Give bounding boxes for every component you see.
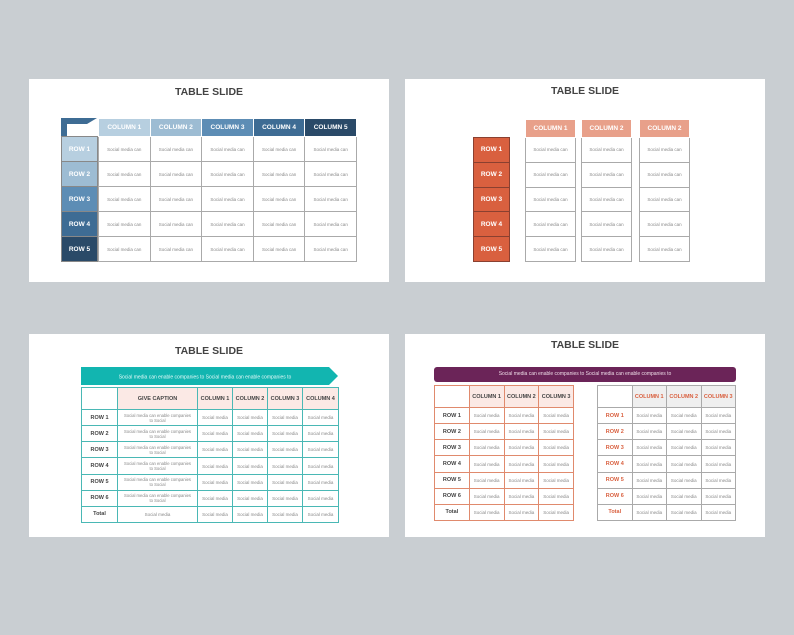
left table: ROW 6 <box>443 493 461 499</box>
left table: Social media <box>543 510 569 515</box>
teal table: COLUMN 2 <box>236 396 264 402</box>
blue table: Social media can <box>159 246 193 252</box>
teal table: COLUMN 4 <box>306 396 335 402</box>
teal table: Social media <box>272 415 298 420</box>
column 1: Social media can <box>533 222 568 227</box>
banner <box>434 367 736 382</box>
right table: ROW 6 <box>606 493 624 499</box>
teal table: Social media can enable companies to Social <box>124 445 191 455</box>
teal table: ROW 6 <box>90 495 109 501</box>
right table <box>597 385 736 521</box>
row labels: ROW 2 <box>69 170 90 178</box>
blue table: COLUMN 1 <box>107 124 141 131</box>
column 2: Social media can <box>589 247 624 252</box>
left table: ROW 5 <box>443 477 461 483</box>
left table: Social media <box>543 429 569 434</box>
blue table: Social media can <box>262 222 296 226</box>
teal table: Social media can enable companies to Social <box>124 477 191 487</box>
left table: Social media <box>508 494 534 499</box>
row labels: ROW 2 <box>481 171 502 178</box>
panel: blue table slide <box>29 79 389 282</box>
banner: Social media can enable companies to Social media can enable companies to <box>499 371 671 377</box>
teal table: Social media <box>308 464 333 469</box>
blue table: Social media can <box>107 146 141 152</box>
teal table <box>81 387 339 523</box>
blue table: COLUMN 4 <box>262 124 296 131</box>
teal table: Social media <box>237 496 263 501</box>
teal table: Social media <box>308 415 333 420</box>
blue table: Social media can <box>262 246 296 252</box>
row labels: ROW 5 <box>69 246 90 252</box>
teal table: Social media <box>237 431 263 436</box>
left table: COLUMN 3 <box>542 394 570 400</box>
teal table: Social media <box>202 512 228 517</box>
column 1: Social media can <box>533 147 568 152</box>
blue table: Social media can <box>314 146 348 152</box>
row labels: ROW 4 <box>69 220 90 228</box>
right table: Social media <box>636 445 662 450</box>
row labels <box>61 136 98 262</box>
teal table: Social media <box>308 431 333 436</box>
column 3: Social media can <box>647 247 682 252</box>
title: TABLE SLIDE <box>551 339 619 351</box>
right table: ROW 5 <box>606 477 624 483</box>
right table: ROW 4 <box>606 461 624 467</box>
column 1: COLUMN 1 <box>534 125 567 132</box>
column 3: Social media can <box>647 222 682 227</box>
teal table: Social media <box>308 480 333 485</box>
right table: Social media <box>671 413 697 418</box>
left table: Social media <box>474 429 500 434</box>
teal table: Social media can enable companies to Social <box>124 493 191 503</box>
right table: COLUMN 2 <box>669 394 698 400</box>
teal table: ROW 3 <box>90 447 109 453</box>
column 3: Social media can <box>647 197 682 202</box>
left table: Social media <box>474 478 500 483</box>
blue table: Social media can <box>107 196 141 202</box>
left table: COLUMN 1 <box>472 394 501 400</box>
left table: ROW 4 <box>443 461 461 467</box>
panel: teal table slide <box>29 334 389 537</box>
right table: Social media <box>636 429 662 434</box>
left table: ROW 2 <box>443 429 461 435</box>
teal table: Social media <box>272 480 298 485</box>
blue table: Social media can <box>159 172 193 176</box>
column 2: COLUMN 2 <box>590 125 623 132</box>
teal table: Social media <box>272 512 298 517</box>
teal table: Social media <box>237 480 263 485</box>
blue table: Social media can <box>262 146 296 152</box>
left table: COLUMN 2 <box>507 394 536 400</box>
right table: Social media <box>705 478 731 483</box>
blue table: Social media can <box>314 196 348 202</box>
right table: Social media <box>636 494 662 499</box>
right table: Social media <box>705 462 731 467</box>
title: TABLE SLIDE <box>551 85 619 97</box>
right table: Social media <box>705 413 731 418</box>
blue table: Social media can <box>107 222 141 226</box>
blue table: Social media can <box>159 196 193 202</box>
blue table: Social media can <box>210 246 245 252</box>
teal table: ROW 1 <box>90 415 109 421</box>
right table: Social media <box>636 478 662 483</box>
left table: Social media <box>508 445 534 450</box>
teal table: Social media <box>202 431 228 436</box>
icon: corner tab <box>61 118 97 136</box>
left table: Social media <box>508 510 534 515</box>
row labels <box>473 137 510 262</box>
left table: Social media <box>543 478 569 483</box>
left table <box>434 385 574 521</box>
column 2: Social media can <box>589 172 624 177</box>
column 3: Social media can <box>647 172 682 177</box>
teal table: GIVE CAPTION <box>138 396 177 402</box>
blue table: Social media can <box>107 246 141 252</box>
column 1: Social media can <box>533 172 568 177</box>
left table: ROW 1 <box>443 413 461 419</box>
right table: Total <box>608 509 621 515</box>
teal table: Social media <box>308 512 333 517</box>
right table: ROW 3 <box>606 445 624 451</box>
teal table: Total <box>93 511 106 517</box>
right table: ROW 1 <box>606 413 624 419</box>
teal table: Social media <box>272 431 298 436</box>
row labels: ROW 1 <box>69 146 90 152</box>
row labels: ROW 1 <box>481 146 502 153</box>
teal table: COLUMN 3 <box>271 396 299 402</box>
teal table: Social media <box>308 447 333 452</box>
teal table: Social media <box>202 496 228 501</box>
column 1: Social media can <box>533 247 568 252</box>
blue table: COLUMN 2 <box>159 124 193 131</box>
blue table: Social media can <box>262 196 296 202</box>
column 3: Social media can <box>647 147 682 152</box>
blue table: COLUMN 5 <box>314 124 348 131</box>
blue table: Social media can <box>159 222 193 226</box>
right table: Social media <box>636 462 662 467</box>
left table: Social media <box>543 445 569 450</box>
blue table: Social media can <box>210 172 245 176</box>
left table: Social media <box>543 494 569 499</box>
teal table: ROW 5 <box>90 479 109 485</box>
panel: orange table slide <box>405 79 765 282</box>
blue table <box>98 119 357 262</box>
right table: Social media <box>705 429 731 434</box>
banner arrow <box>81 367 338 385</box>
left table: Social media <box>543 462 569 467</box>
teal table: Social media <box>308 496 333 501</box>
blue table: Social media can <box>107 172 141 176</box>
row labels: ROW 5 <box>481 246 502 253</box>
banner arrow: Social media can enable companies to Social media can enable companies to <box>119 374 292 380</box>
right table: Social media <box>636 510 662 515</box>
blue table: Social media can <box>314 172 348 176</box>
blue table: Social media can <box>314 246 348 252</box>
teal table: ROW 4 <box>90 463 109 469</box>
teal table: Social media can enable companies to Social <box>124 461 191 471</box>
column 1 <box>525 120 576 262</box>
left table: Social media <box>543 413 569 418</box>
left table: Social media <box>508 462 534 467</box>
left table: Social media <box>474 494 500 499</box>
teal table: Social media <box>202 447 228 452</box>
title: TABLE SLIDE <box>175 86 243 98</box>
row labels: ROW 3 <box>69 196 90 202</box>
blue table: Social media can <box>210 146 245 152</box>
teal table: Social media <box>202 464 228 469</box>
teal table: Social media <box>145 512 170 517</box>
right table: Social media <box>671 462 697 467</box>
teal table: Social media <box>202 415 228 420</box>
column 2: Social media can <box>589 197 624 202</box>
blue table: Social media can <box>210 196 245 202</box>
right table: Social media <box>671 478 697 483</box>
panel: purple table slide <box>405 334 765 537</box>
blue table: Social media can <box>210 222 245 226</box>
left table: Social media <box>474 462 500 467</box>
teal table: ROW 2 <box>90 431 109 437</box>
right table: Social media <box>671 445 697 450</box>
column 3: COLUMN 2 <box>648 125 681 132</box>
teal table: Social media <box>272 447 298 452</box>
right table: Social media <box>671 494 697 499</box>
left table: Total <box>446 509 458 515</box>
column 2: Social media can <box>589 222 624 227</box>
teal table: Social media <box>237 512 263 517</box>
right table: ROW 2 <box>606 429 624 435</box>
left table: Social media <box>508 413 534 418</box>
blue table: Social media can <box>262 172 296 176</box>
blue table: Social media can <box>314 222 348 226</box>
title: TABLE SLIDE <box>175 345 243 357</box>
right table: Social media <box>705 494 731 499</box>
right table: COLUMN 3 <box>704 394 733 400</box>
row labels: ROW 3 <box>481 196 502 203</box>
column 2: Social media can <box>589 147 624 152</box>
teal table: Social media <box>202 480 228 485</box>
column 3 <box>639 120 690 262</box>
teal table: Social media <box>237 464 263 469</box>
left table: Social media <box>508 429 534 434</box>
right table: Social media <box>705 445 731 450</box>
teal table: Social media <box>237 447 263 452</box>
right table: Social media <box>671 510 697 515</box>
left table: Social media <box>474 413 500 418</box>
teal table: Social media <box>272 496 298 501</box>
left table: Social media <box>474 510 500 515</box>
column 2 <box>581 120 632 262</box>
blue table: Social media can <box>159 146 193 152</box>
right table: Social media <box>705 510 731 515</box>
left table: ROW 3 <box>443 445 461 451</box>
right table: Social media <box>636 413 662 418</box>
teal table: COLUMN 1 <box>201 396 229 402</box>
teal table: Social media <box>272 464 298 469</box>
blue table: COLUMN 3 <box>210 124 244 131</box>
left table: Social media <box>508 478 534 483</box>
teal table: Social media can enable companies to Social <box>124 413 191 423</box>
teal table: Social media <box>237 415 263 420</box>
left table: Social media <box>474 445 500 450</box>
right table: Social media <box>671 429 697 434</box>
row labels: ROW 4 <box>481 221 502 228</box>
teal table: Social media can enable companies to Social <box>124 429 191 439</box>
right table: COLUMN 1 <box>635 394 664 400</box>
column 1: Social media can <box>533 197 568 202</box>
